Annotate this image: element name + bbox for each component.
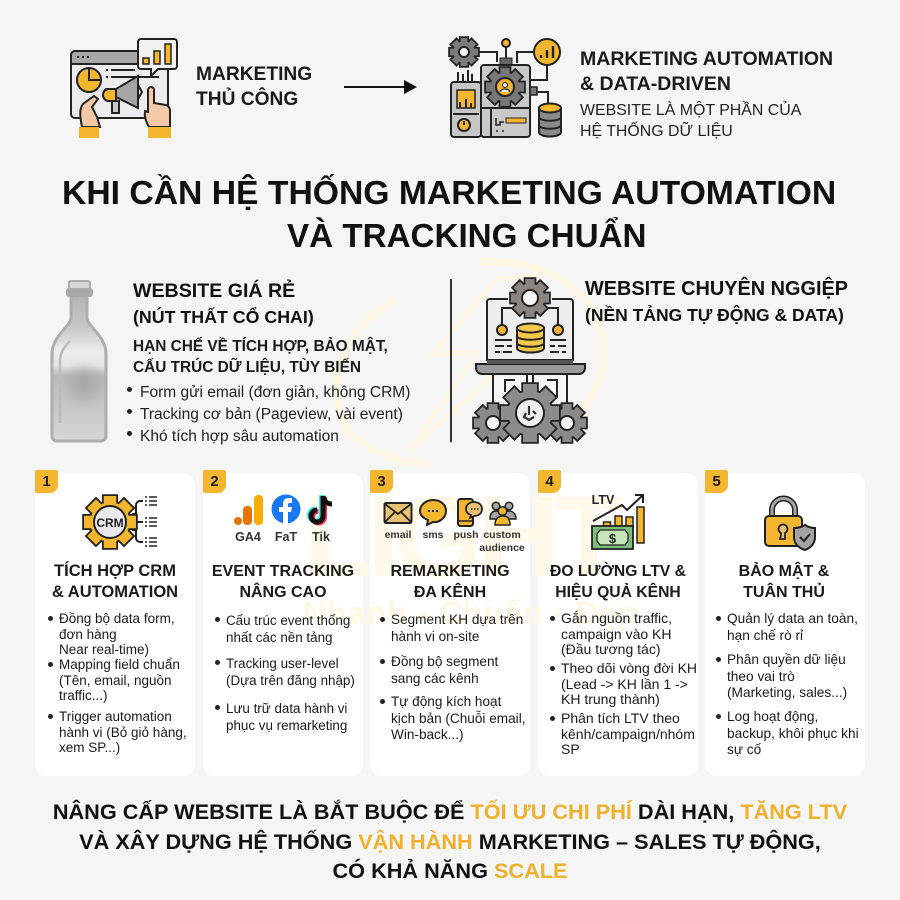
watermark: brand name: Nhanh - Chuẩn - Đẹp <box>303 595 638 631</box>
list: card 3 <box>380 612 526 742</box>
callout: conclusion: NÂNG CẤP WEBSITE LÀ BẮT BUỘC ĐỂ TỐI ƯU CHI PHÍ DÀI HẠN, TĂNG LTV <box>53 799 847 824</box>
list: card 4: Phân tích LTV theo <box>561 710 680 726</box>
list: card 1 <box>48 611 187 755</box>
list: card 2: nhất các nền tảng <box>226 630 332 645</box>
arrow: manual to automation <box>344 80 417 94</box>
subheading: limitations: HẠN CHẾ VỀ TÍCH HỢP, BẢO MẬT, <box>133 338 388 355</box>
icon: laptop with gears <box>472 277 588 444</box>
heading: card 4: HIỆU QUẢ KÊNH <box>555 584 681 601</box>
icon: manual marketing dashboard <box>70 38 178 138</box>
heading: card 1: & AUTOMATION <box>52 583 178 601</box>
list: card 4: (Đầu tương tác) <box>561 641 660 657</box>
list: card 4: kênh/campaign/nhóm <box>561 726 695 742</box>
title <box>62 174 836 255</box>
list: card 2: (Dựa trên đăng nhập) <box>226 673 355 688</box>
badge: 3 <box>370 470 393 493</box>
label: sms: sms <box>422 529 444 541</box>
list: card 5: backup, khôi phục khi <box>727 726 859 740</box>
label: Tik: Tik <box>312 530 330 544</box>
label: email: email <box>385 529 411 541</box>
icon: email, sms, push, audience <box>384 498 517 527</box>
panel: card 1 background <box>35 473 195 776</box>
list: card 5: hạn chế rò rỉ <box>727 628 803 642</box>
icon: LTV growth with banknote: $ <box>609 531 617 546</box>
list: card 4: Theo dõi vòng đời KH <box>561 660 697 676</box>
heading: cheap website: (NÚT THẤT CỔ CHAI) <box>133 307 314 327</box>
list: cheap website limits <box>127 384 410 445</box>
list: cheap website limits: Form gửi email (đơn giản, không CRM) <box>140 384 410 401</box>
list: card 3: Tự động kích hoạt <box>391 694 501 709</box>
list: card 2 <box>215 613 355 733</box>
panel: card 2 background <box>203 473 363 776</box>
icon: LTV growth with banknote <box>591 493 645 550</box>
subheading: limitations <box>133 336 388 376</box>
badge: 1: 1 <box>42 473 51 490</box>
icon: automation machine <box>448 36 562 138</box>
list: card 2: Tracking user-level <box>226 656 339 671</box>
icon: padlock with shield <box>764 496 816 552</box>
label: FaT: FaT <box>275 530 297 544</box>
list: card 5 <box>716 611 859 757</box>
list: card 5: (Marketing, sales...) <box>727 685 847 700</box>
list: card 1: hành vi (Bỏ giỏ hàng, <box>59 724 187 740</box>
icon: CRM gear: CRM <box>96 516 124 530</box>
icon: GA4, Facebook, TikTok <box>234 494 332 526</box>
panel: card 5 background <box>705 473 865 776</box>
list: card 3: kịch bản (Chuỗi email, <box>391 710 526 726</box>
heading: cheap website <box>133 280 314 327</box>
heading: manual marketing: THỦ CÔNG <box>196 88 298 110</box>
heading: professional website: (NỀN TẢNG TỰ ĐỘNG & DATA) <box>585 305 844 325</box>
list: card 1: đơn hàng <box>59 626 117 642</box>
list: card 4: KH trung thành) <box>561 691 660 707</box>
watermark: lightning logo <box>332 258 608 468</box>
list: card 5: sự cố <box>727 742 761 757</box>
text: cheap website bottleneck <box>127 280 410 445</box>
badge: 4: 4 <box>545 473 554 490</box>
badge: 5: 5 <box>712 473 721 490</box>
heading: marketing automation and data-driven: MARKETING AUTOMATION <box>580 48 833 70</box>
list: card 1: Mapping field chuẩn <box>59 657 180 672</box>
heading: manual marketing <box>196 64 312 110</box>
list: card 4: campaign vào KH <box>561 626 672 642</box>
list: card 1: traffic...) <box>59 688 108 703</box>
label: custom audience: custom <box>483 529 521 541</box>
list: card 4: (Lead -> KH lần 1 -> <box>561 676 688 692</box>
heading: professional website: WEBSITE CHUYÊN NGGIỆP <box>585 278 848 300</box>
subheading: limitations: CẤU TRÚC DỮ LIỆU, TÙY BIẾN <box>133 359 361 376</box>
heading: marketing automation and data-driven <box>580 48 833 140</box>
heading: card 5: TUÂN THỦ <box>743 584 825 601</box>
callout: conclusion: VÀ XÂY DỰNG HỆ THỐNG VẬN HÀNH MARKETING – SALES TỰ ĐỘNG, <box>79 828 821 854</box>
heading: card 5 <box>739 562 829 601</box>
list: card 5: Phân quyền dữ liệu <box>727 652 846 667</box>
heading: card 2: EVENT TRACKING <box>212 563 354 580</box>
heading: card 1: TÍCH HỢP CRM <box>54 562 176 580</box>
callout: conclusion: CÓ KHẢ NĂNG SCALE <box>333 858 567 883</box>
list: card 3: Đồng bộ segment <box>391 654 498 669</box>
list: card 1: Đồng bộ data form, <box>59 611 175 626</box>
list: card 5: Quản lý data an toàn, <box>727 611 858 626</box>
list: card 3: Segment KH dựa trên <box>391 612 523 627</box>
heading: card 4: ĐO LƯỜNG LTV & <box>550 563 686 580</box>
list: card 1: xem SP...) <box>59 740 120 755</box>
list: card 1: Near real-time) <box>59 642 149 657</box>
heading: marketing automation and data-driven: HỆ THỐNG DỮ LIỆU <box>580 123 733 140</box>
list: card 1: Trigger automation <box>59 709 172 724</box>
badge: 2: 2 <box>210 473 219 490</box>
badge: 2 <box>203 470 226 493</box>
list: card 3: sang các kênh <box>391 670 479 686</box>
heading: card 5: BẢO MẬT & <box>739 563 829 580</box>
label: GA4: GA4 <box>235 530 261 544</box>
list: card 2: Cấu trúc event thống <box>226 613 350 628</box>
list: card 2: Lưu trữ data hành vi <box>226 701 347 716</box>
heading: professional website <box>585 276 848 325</box>
heading: card 2 <box>212 563 354 601</box>
list: card 4: Gắn nguồn traffic, <box>561 610 672 626</box>
watermark: brand name: LIGHT <box>303 473 618 601</box>
callout: conclusion <box>53 799 847 883</box>
heading: card 3: REMARKETING <box>390 563 510 580</box>
heading: card 2: NÂNG CAO <box>239 584 327 601</box>
heading: card 3 <box>390 563 510 601</box>
heading: marketing automation and data-driven: & DATA-DRIVEN <box>580 73 731 95</box>
badge: 4 <box>538 470 561 493</box>
badge: 5 <box>705 470 728 493</box>
list: card 5: theo vai trò <box>727 668 795 684</box>
title: KHI CẦN HỆ THỐNG MARKETING AUTOMATION <box>62 174 836 212</box>
list: cheap website limits: Khó tích hợp sâu automation <box>140 428 339 445</box>
heading: card 3: ĐA KÊNH <box>414 584 486 601</box>
icon: bottle <box>50 280 108 442</box>
list: card 2: phục vụ remarketing <box>226 718 347 733</box>
list: card 1: (Tên, email, nguồn <box>59 672 172 688</box>
heading: card 4 <box>550 562 686 601</box>
label: custom audience: audience <box>479 542 525 554</box>
badge: 3: 3 <box>377 473 386 490</box>
list: card 3: hành vi on-site <box>391 628 479 644</box>
title: VÀ TRACKING CHUẨN <box>287 218 647 255</box>
list: card 3: Win-back...) <box>391 727 464 742</box>
heading: cheap website: WEBSITE GIÁ RẺ <box>133 280 295 302</box>
icon: CRM gear <box>82 494 157 550</box>
panel: card 3 background <box>370 473 530 776</box>
panel: card 4 background <box>538 473 698 776</box>
list: card 5: Log hoạt động, <box>727 709 818 724</box>
label: custom audience <box>479 529 525 554</box>
heading: manual marketing: MARKETING <box>196 64 312 85</box>
heading: card 1 <box>52 561 178 601</box>
icon: LTV growth with banknote: LTV <box>592 493 615 507</box>
list: card 4 <box>550 610 697 757</box>
list: card 4: SP <box>561 741 580 757</box>
badge: 1 <box>35 470 58 493</box>
list: cheap website limits: Tracking cơ bản (Pageview, vài event) <box>140 406 403 423</box>
label: push: push <box>453 529 479 541</box>
heading: marketing automation and data-driven: WEBSITE LÀ MỘT PHẦN CỦA <box>580 102 801 119</box>
